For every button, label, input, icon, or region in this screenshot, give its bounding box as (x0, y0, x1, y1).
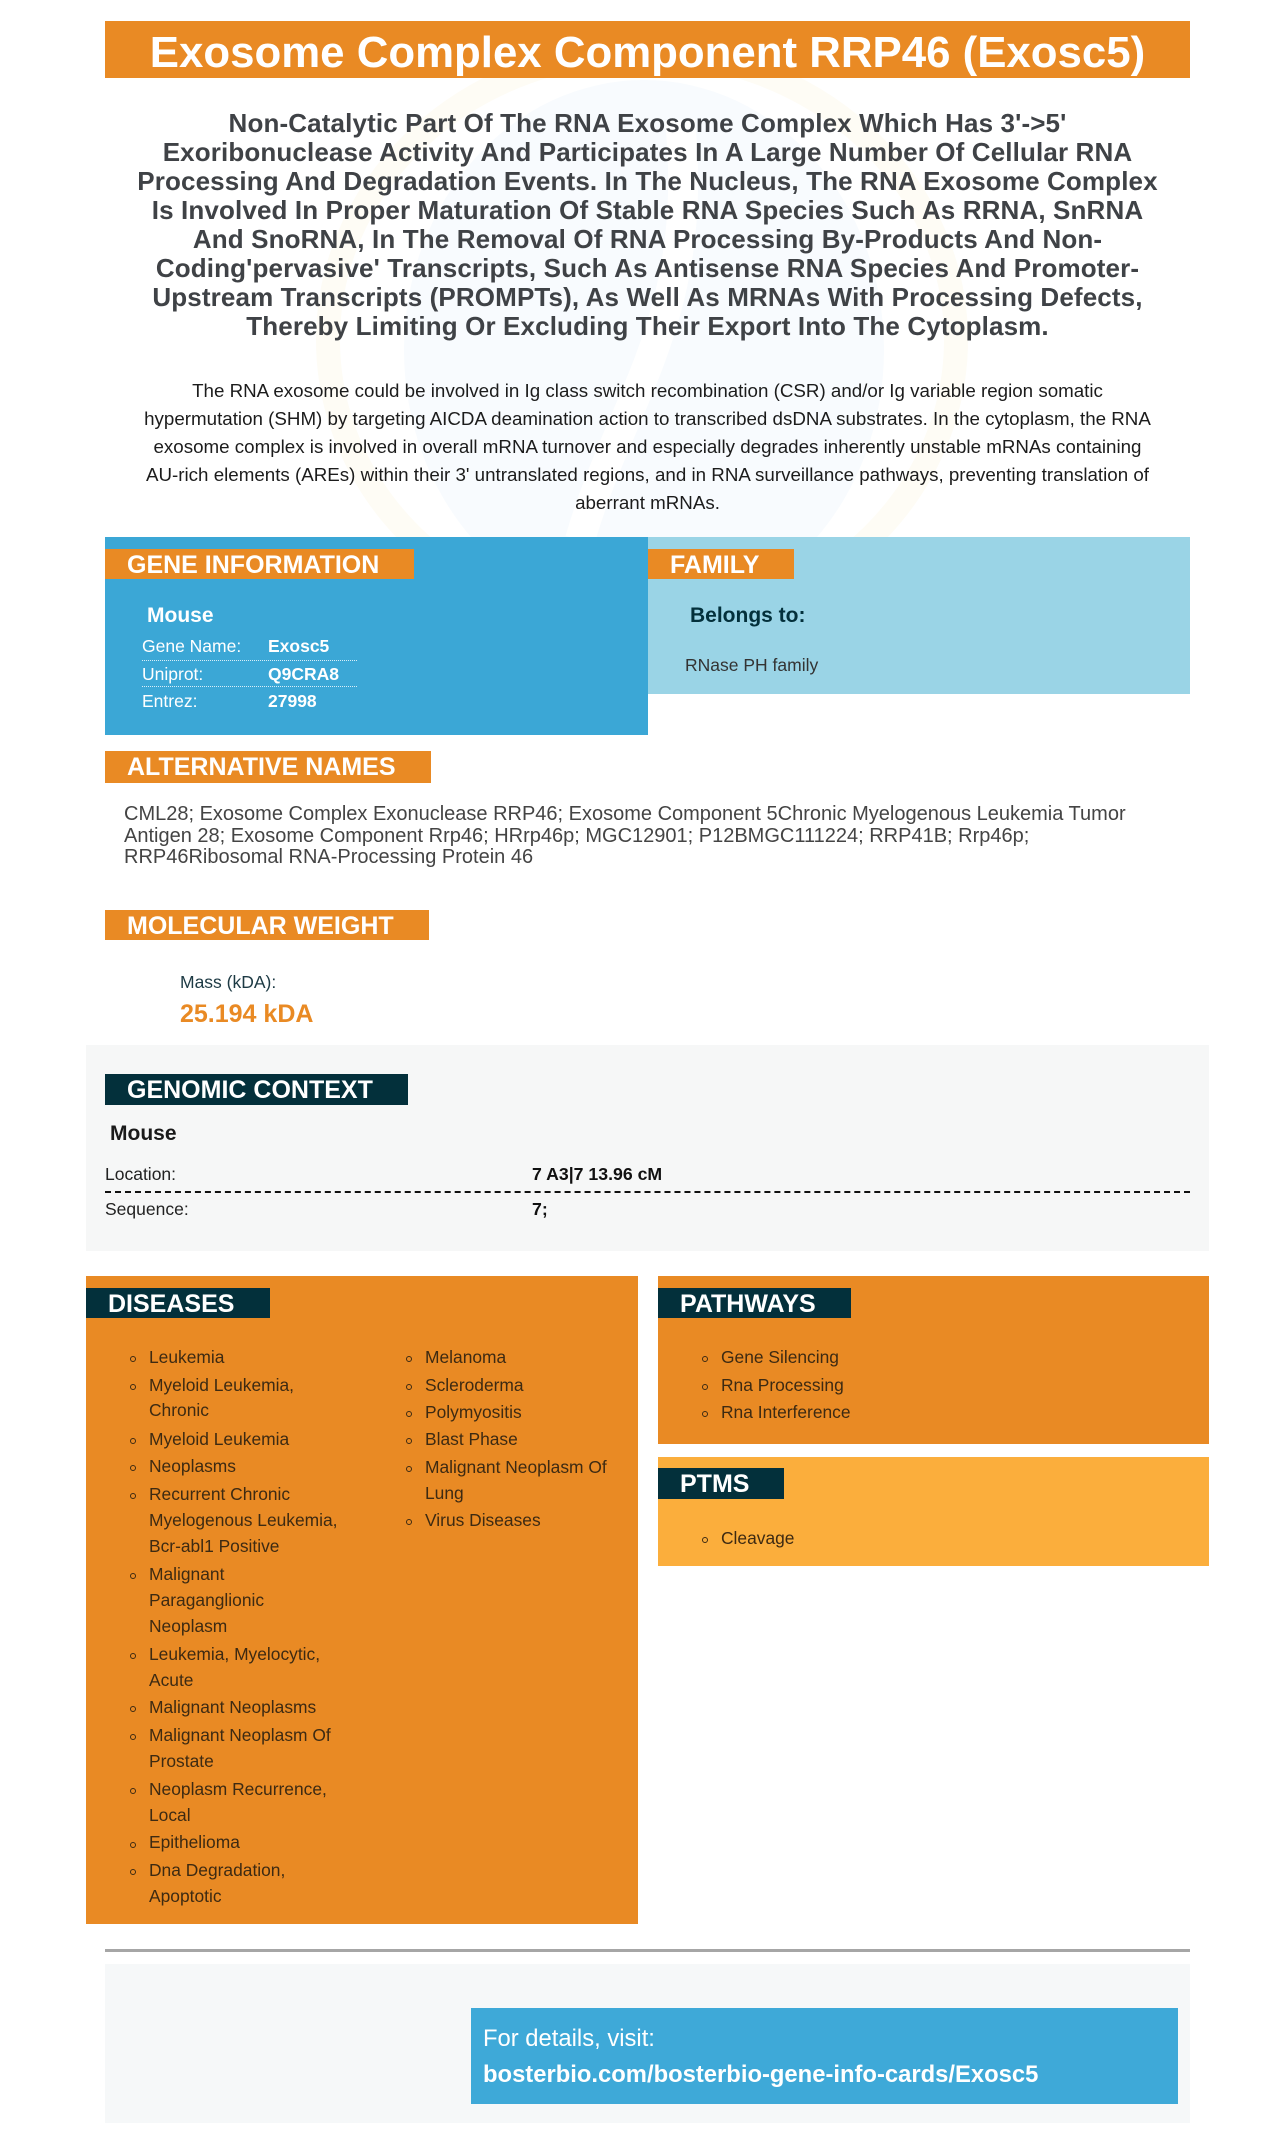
disease list column 1: Neoplasm Recurrence, (149, 1779, 327, 1799)
subtitle summary: Coding'pervasive' Transcripts, Such As Antisense RNA Species And Promoter- (156, 253, 1139, 283)
species label: Mouse (110, 1122, 177, 1145)
callout: details link: For details, visit: (483, 2025, 655, 2052)
heading: family: FAMILY (670, 551, 759, 579)
disease list column 1: Acute (149, 1670, 193, 1690)
disease list column 1: Leukemia (149, 1347, 224, 1367)
description paragraph (144, 380, 1151, 513)
heading: ptms: PTMS (680, 1470, 749, 1498)
disease list column 1: Paraganglionic (149, 1590, 264, 1610)
disease list column 1: Chronic (149, 1400, 209, 1420)
sequence row: 7; (532, 1199, 548, 1219)
heading: genomic context: GENOMIC CONTEXT (127, 1076, 373, 1104)
panel: ptms (658, 1457, 1209, 1566)
heading: family (648, 549, 794, 579)
gene fields table: Entrez: (142, 691, 197, 711)
panel: diseases (86, 1276, 638, 1924)
molecular weight value (180, 972, 313, 1028)
molecular weight value: Mass (kDA): (180, 972, 276, 992)
heading: ptms (658, 1468, 784, 1499)
heading: pathways: PATHWAYS (680, 1290, 816, 1318)
disease list column 2: Polymyositis (425, 1402, 522, 1422)
disease list column 1: Malignant (149, 1564, 224, 1584)
disease list column 1 (130, 1347, 338, 1906)
panel: family (648, 537, 1190, 694)
panel: genomic context (86, 1045, 1209, 1251)
disease list column 1: Bcr-abl1 Positive (149, 1536, 279, 1556)
gene fields table: Q9CRA8 (268, 664, 339, 684)
description paragraph: hypermutation (SHM) by targeting AICDA deamination action to transcribed dsDNA substrates. In the cytoplasm, the RNA (144, 408, 1151, 429)
gene fields table: Gene Name: (142, 636, 241, 656)
disease list column 2: Malignant Neoplasm Of (425, 1457, 607, 1477)
alternative names text (124, 803, 1126, 868)
subtitle summary: Non-Catalytic Part Of The RNA Exosome Complex Which Has 3'->5' (229, 108, 1066, 138)
gene fields table (142, 636, 357, 711)
disease list column 1: Local (149, 1805, 191, 1825)
heading: diseases (86, 1288, 270, 1318)
disease list column 1: Neoplasms (149, 1456, 236, 1476)
heading: diseases: DISEASES (108, 1290, 234, 1318)
title banner (105, 21, 1190, 78)
ptm list: Cleavage (721, 1528, 794, 1548)
subtitle summary: Processing And Degradation Events. In The Nucleus, The RNA Exosome Complex (137, 166, 1158, 196)
pathway list: Gene Silencing (721, 1347, 839, 1367)
disease list column 2: Blast Phase (425, 1429, 518, 1449)
disease list column 1: Myelogenous Leukemia, (149, 1510, 338, 1530)
disease list column 2: Scleroderma (425, 1375, 524, 1395)
heading: pathways (658, 1288, 851, 1318)
disease list column 2 (406, 1347, 607, 1530)
pathway list: Rna Processing (721, 1375, 844, 1395)
disease list column 1: Malignant Neoplasm Of (149, 1725, 331, 1745)
belongs to label: Belongs to: (690, 604, 806, 627)
subtitle summary: Thereby Limiting Or Excluding Their Export Into The Cytoplasm. (246, 311, 1049, 341)
disease list column 1: Prostate (149, 1751, 214, 1771)
description paragraph: AU-rich elements (AREs) within their 3' untranslated regions, and in RNA surveillance pathways, preventing translation of (146, 464, 1149, 485)
disease list column 1: Myeloid Leukemia (149, 1429, 289, 1449)
callout: details link: bosterbio.com/bosterbio-gene-info-cards/Exosc5 (483, 2061, 1038, 2088)
gene fields table: 27998 (268, 691, 317, 711)
watermark: faint DNA logo (316, 78, 968, 537)
disease list column 1: Epithelioma (149, 1832, 240, 1852)
disease list column 1: Apoptotic (149, 1886, 222, 1906)
disease list column 2: Lung (425, 1483, 464, 1503)
pathway list (702, 1347, 851, 1422)
disease list column 1: Dna Degradation, (149, 1860, 285, 1880)
disease list column 1: Recurrent Chronic (149, 1484, 290, 1504)
description paragraph: aberrant mRNAs. (575, 492, 720, 513)
molecular weight value: 25.194 kDA (180, 1000, 313, 1028)
panel: pathways (658, 1276, 1209, 1444)
disease list column 2: Melanoma (425, 1347, 506, 1367)
heading: alternative names: ALTERNATIVE NAMES (127, 753, 396, 781)
alternative names text: RRP46Ribosomal RNA-Processing Protein 46 (124, 846, 533, 868)
footer panel (105, 1964, 1190, 2123)
heading: molecular weight: MOLECULAR WEIGHT (127, 912, 394, 940)
description paragraph: The RNA exosome could be involved in Ig class switch recombination (CSR) and/or Ig variable region somatic (192, 380, 1103, 401)
subtitle summary (137, 108, 1158, 341)
sequence row: Sequence: (105, 1199, 189, 1219)
disease list column 1: Leukemia, Myelocytic, (149, 1644, 320, 1664)
subtitle summary: Is Involved In Proper Maturation Of Stable RNA Species Such As RRNA, SnRNA (152, 195, 1143, 225)
species label: Mouse (147, 604, 214, 627)
location row (105, 1164, 662, 1184)
gene fields table: Uniprot: (142, 664, 203, 684)
subtitle summary: Exoribonuclease Activity And Participates In A Large Number Of Cellular RNA (163, 137, 1132, 167)
subtitle summary: Upstream Transcripts (PROMPTs), As Well As MRNAs With Processing Defects, (152, 282, 1143, 312)
disease list column 1: Malignant Neoplasms (149, 1697, 316, 1717)
disease list column 1: Myeloid Leukemia, (149, 1375, 294, 1395)
family value: RNase PH family (685, 655, 818, 675)
location row: Location: (105, 1164, 176, 1184)
gene fields table: Exosc5 (268, 636, 329, 656)
heading: gene information: GENE INFORMATION (127, 551, 379, 579)
alternative names text: Antigen 28; Exosome Component Rrp46; HRrp46p; MGC12901; P12BMGC111224; RRP41B; Rrp46p; (124, 825, 1029, 847)
alternative names text: CML28; Exosome Complex Exonuclease RRP46; Exosome Component 5Chronic Myelogenous Leukemia Tumor (124, 803, 1126, 825)
description paragraph: exosome complex is involved in overall mRNA turnover and especially degrades inherently unstable mRNAs containing (153, 436, 1142, 457)
subtitle summary: And SnoRNA, In The Removal Of RNA Processing By-Products And Non- (193, 224, 1102, 254)
callout: details link (471, 2008, 1178, 2104)
disease list column 2: Virus Diseases (425, 1510, 541, 1530)
location row: 7 A3|7 13.96 cM (532, 1164, 662, 1184)
sequence row (105, 1199, 548, 1219)
panel: gene information (105, 537, 648, 735)
title text: Exosome Complex Component RRP46 (Exosc5) (150, 28, 1145, 77)
disease list column 1: Neoplasm (149, 1616, 227, 1636)
pathway list: Rna Interference (721, 1402, 851, 1422)
